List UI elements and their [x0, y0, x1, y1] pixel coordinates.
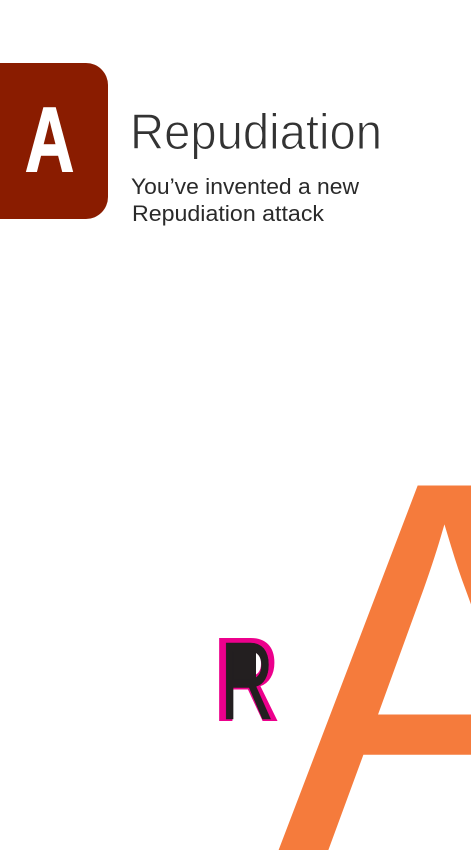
description text: You’ve invented a new — [131, 174, 359, 199]
card badge: letter A — [0, 63, 108, 219]
badge background — [0, 63, 108, 219]
title: Repudiation — [130, 104, 382, 160]
description text — [131, 174, 359, 226]
description text: Repudiation attack — [132, 201, 325, 226]
letter R with pink outline: R — [213, 612, 279, 747]
letter R with pink outline: R — [220, 620, 274, 742]
badge letter: A — [25, 89, 74, 191]
